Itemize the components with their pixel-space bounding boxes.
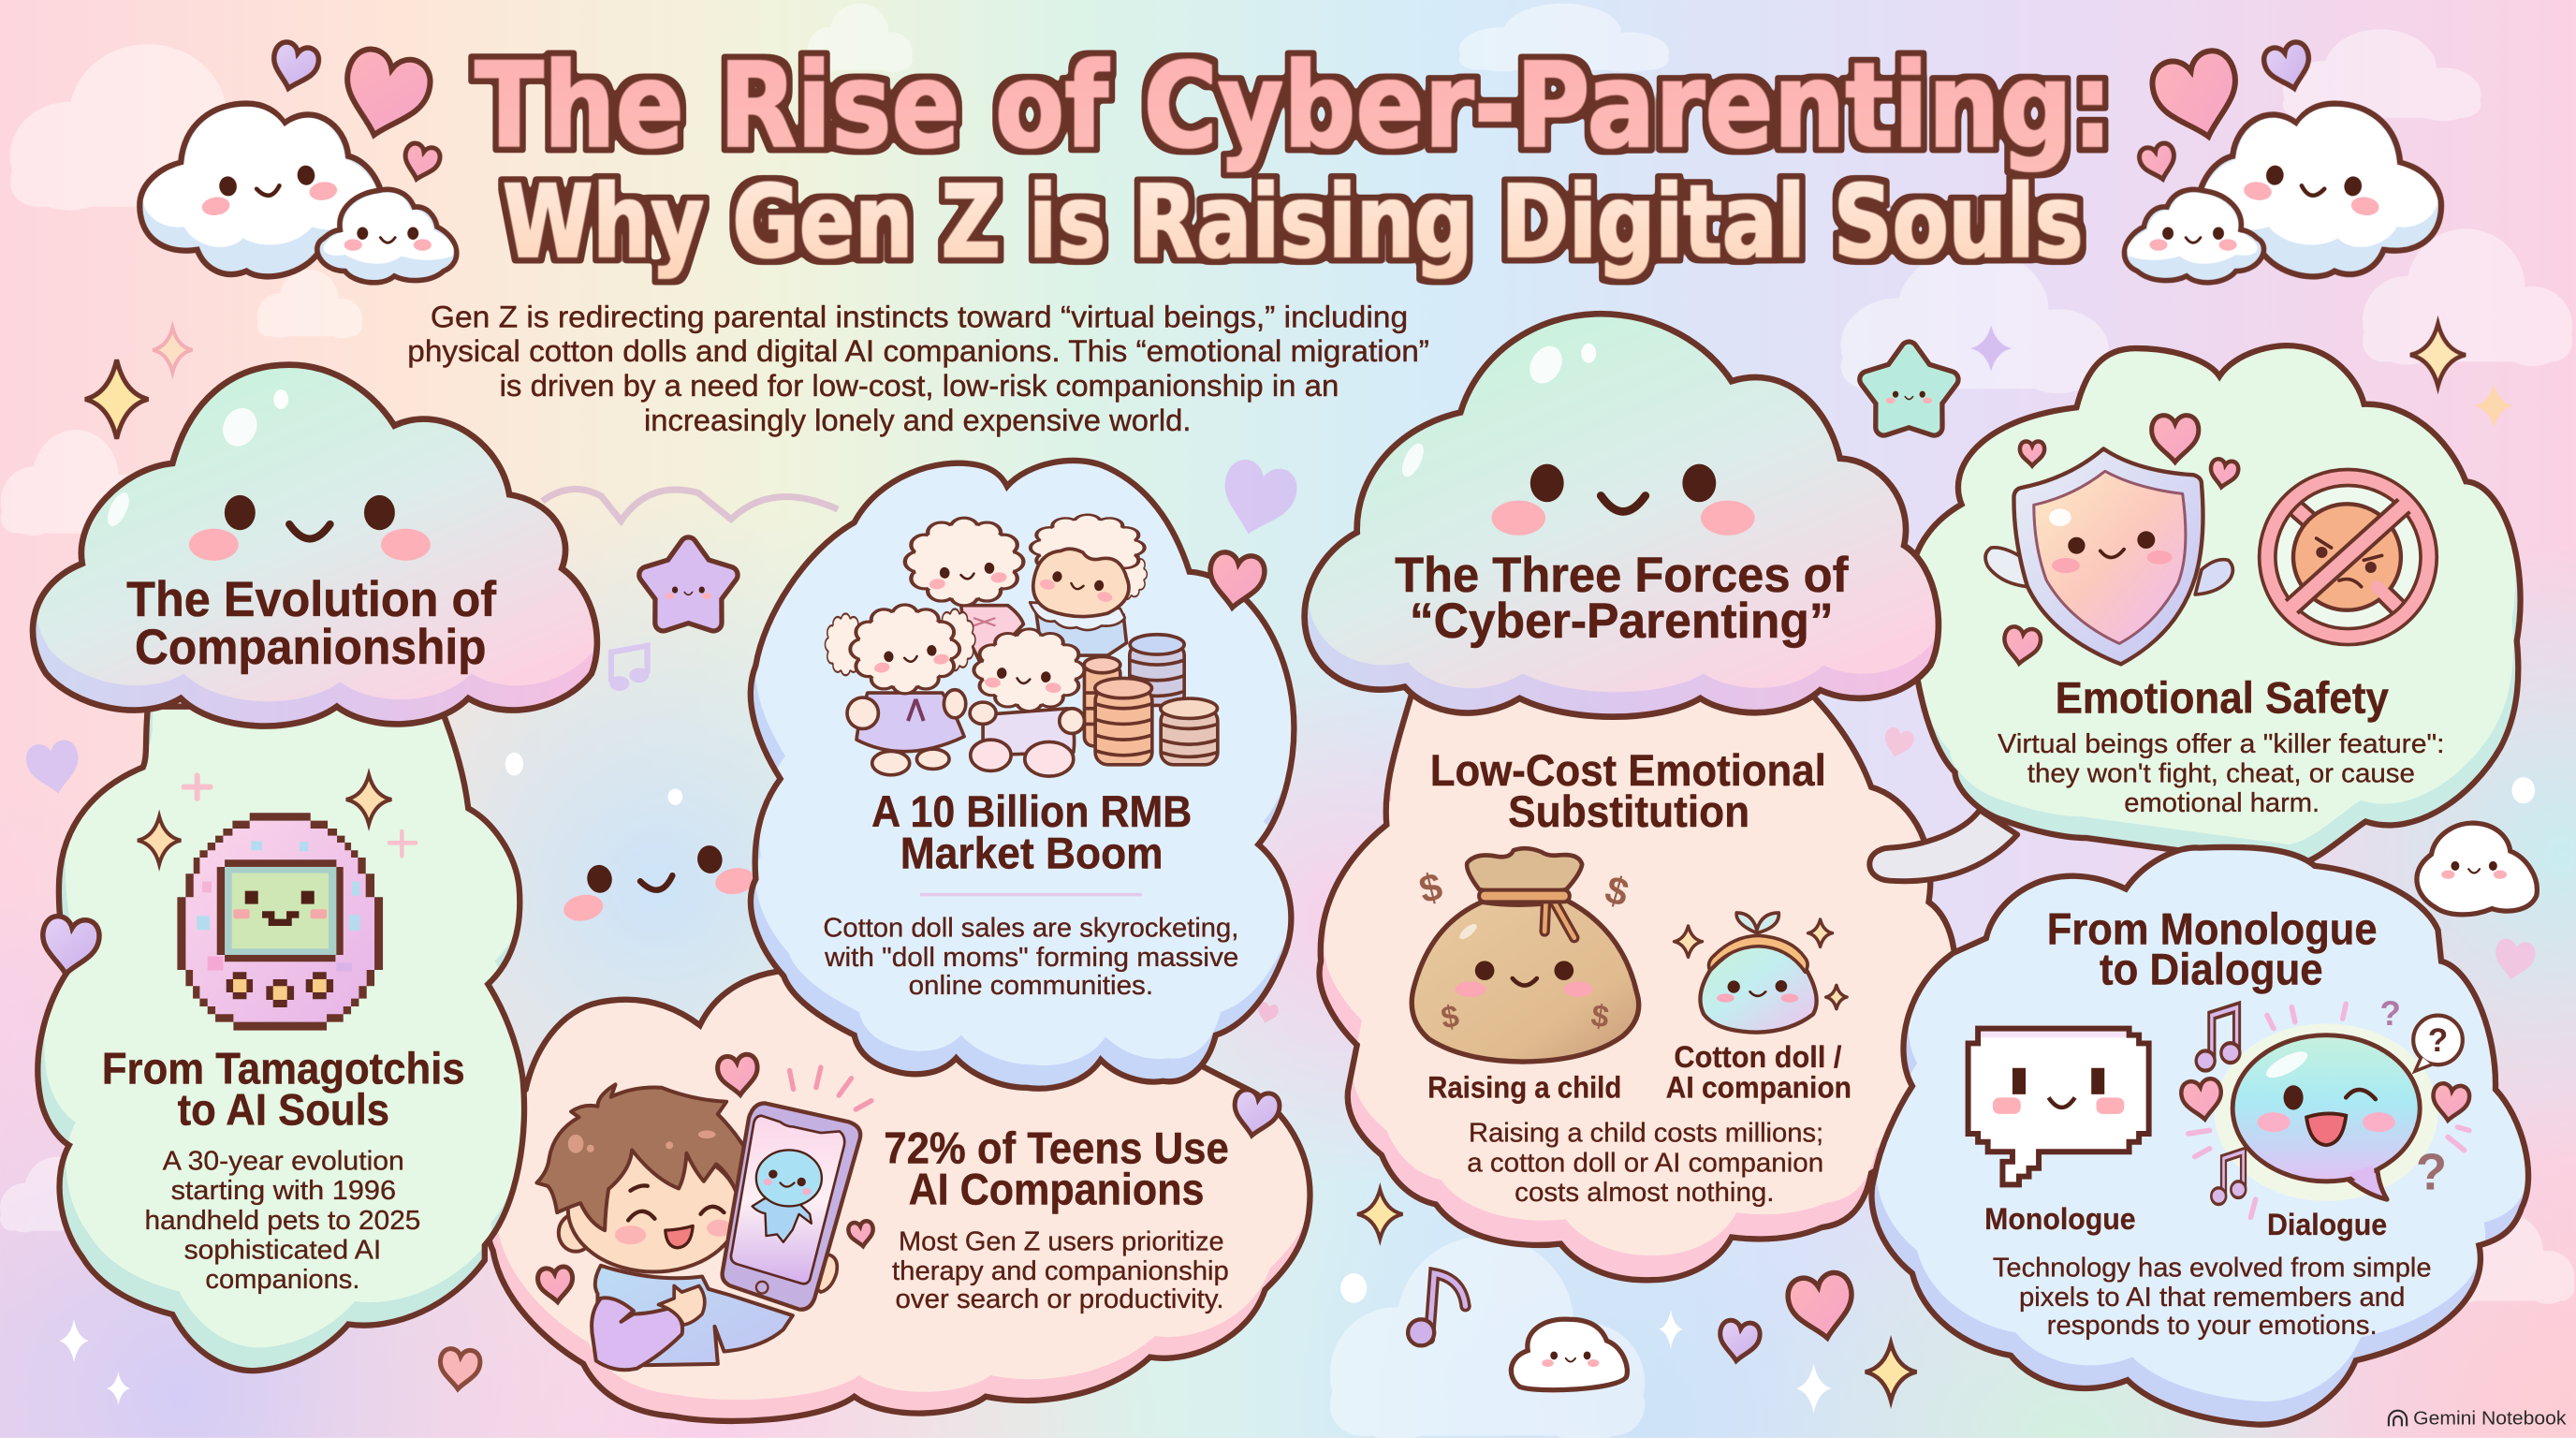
icon: money bag: $ xyxy=(1601,867,1633,915)
heading: evolution: The Evolution of xyxy=(126,572,497,627)
label: dialogue: Dialogue xyxy=(2267,1208,2387,1241)
icon: no-fighting sign xyxy=(2267,477,2429,637)
icon: money bag: $ xyxy=(1439,999,1462,1036)
text: monologue body: pixels to AI that remembers and xyxy=(2019,1283,2405,1313)
panel: emotional safety xyxy=(1906,324,2521,866)
icon: smiling shield xyxy=(1985,448,2429,664)
face: three forces cloud xyxy=(1491,464,1755,536)
heading: three forces xyxy=(1395,548,1849,649)
icon: music notes, hearts and question marks: ? xyxy=(2416,1144,2447,1201)
text: emotional safety body: emotional harm. xyxy=(2124,788,2320,818)
title line 1: The Rise of Cyber-Parenting: xyxy=(475,38,2113,174)
text: low-cost body: costs almost nothing. xyxy=(1515,1178,1774,1208)
icon: shield hearts xyxy=(2001,416,2240,666)
text: low-cost body: Raising a child costs millions; xyxy=(1469,1119,1823,1149)
icon: clouds right xyxy=(2125,104,2441,283)
heading: monologue: From Monologue xyxy=(2047,904,2378,954)
label: cotton doll / AI companion xyxy=(1666,1040,1852,1104)
heading: monologue xyxy=(2047,904,2378,994)
heading: tamagotchis: From Tamagotchis xyxy=(102,1044,465,1093)
text: low-cost body: a cotton doll or AI companion xyxy=(1467,1148,1823,1178)
intro text: Gen Z is redirecting parental instincts toward “virtual beings,” including xyxy=(431,300,1408,333)
small cloud: bottom xyxy=(1511,1319,1627,1390)
heading: emotional safety: Emotional Safety xyxy=(2056,674,2389,724)
icon: rainbow dialogue bubble xyxy=(2215,1023,2438,1201)
panel: tamagotchis xyxy=(37,683,531,1371)
text: monologue body: Technology has evolved from simple xyxy=(1993,1254,2431,1284)
panel: low-cost emotional substitution xyxy=(1320,666,1960,1280)
heading: low-cost: Low-Cost Emotional xyxy=(1430,746,1826,796)
text: tamagotchi body: A 30-year evolution xyxy=(163,1147,404,1177)
background face xyxy=(557,839,756,924)
panel: from monologue to dialogue xyxy=(1871,824,2533,1425)
text: tamagotchi body: sophisticated AI xyxy=(184,1235,381,1265)
heading: monologue: to Dialogue xyxy=(2100,945,2323,994)
heading: 72% of teens: AI Companions xyxy=(909,1165,1204,1214)
heading: 72% of teens: 72% of Teens Use xyxy=(884,1124,1229,1174)
icon: pixel speech bubble xyxy=(1969,1029,2149,1184)
icon: title hearts left xyxy=(267,39,442,183)
intro text: is driven by a need for low-cost, low-risk companionship in an xyxy=(500,369,1339,403)
label: cotton doll / AI companion: Cotton doll / xyxy=(1674,1040,1841,1074)
intro text xyxy=(407,300,1429,437)
connector tail xyxy=(1869,810,2017,881)
icon: music notes, hearts and question marks xyxy=(2180,994,2471,1217)
heading: 72% of teens xyxy=(884,1124,1229,1214)
panel: 72% of teens xyxy=(485,948,1315,1421)
icon: purple star xyxy=(648,546,729,623)
small cloud: right edge xyxy=(2417,823,2537,915)
icon: music notes, hearts and question marks: ? xyxy=(2428,1022,2448,1059)
text: market body: online communities. xyxy=(909,971,1153,1001)
text: tamagotchi body: starting with 1996 xyxy=(171,1176,396,1206)
heading: low-cost xyxy=(1430,746,1826,837)
icon: money bag: $ xyxy=(1414,864,1446,912)
text: emotional safety body xyxy=(1998,729,2445,818)
text: tamagotchi body xyxy=(145,1147,420,1295)
text: market body: with "doll moms" forming massive xyxy=(824,943,1238,973)
panel: market boom xyxy=(751,437,1299,1089)
icon: clouds left xyxy=(139,104,457,283)
icon: jelly doll xyxy=(1675,913,1847,1033)
panel: evolution of companionship header xyxy=(33,340,600,726)
icon: title hearts right xyxy=(2137,39,2316,183)
icon: coin stacks xyxy=(1084,635,1218,765)
label: raising a child: Raising a child xyxy=(1427,1070,1621,1104)
text: teens body: therapy and companionship xyxy=(892,1256,1229,1286)
heading: market boom xyxy=(871,787,1192,879)
watermark: Gemini Notebook xyxy=(2413,1409,2567,1430)
heading: low-cost: Substitution xyxy=(1508,787,1749,837)
text: monologue body: responds to your emotions. xyxy=(2047,1311,2378,1341)
label: monologue: Monologue xyxy=(1984,1202,2136,1236)
text: market body xyxy=(823,913,1238,1001)
heading: market boom: A 10 Billion RMB xyxy=(871,787,1192,837)
title group xyxy=(139,38,2441,283)
text: market body: Cotton doll sales are skyrocketing, xyxy=(823,913,1238,943)
title line 2: Why Gen Z is Raising Digital Souls xyxy=(503,165,2083,281)
heading: market boom: Market Boom xyxy=(900,829,1164,879)
text: low-cost body xyxy=(1467,1119,1823,1208)
icon: mint star xyxy=(1868,350,1950,427)
icon: hearts around boy xyxy=(536,1053,1281,1304)
icon: tamagotchi sparkles xyxy=(138,775,416,864)
text: tamagotchi body: companions. xyxy=(205,1265,359,1295)
decorative hearts, stars and sparkles xyxy=(23,324,2538,1413)
illustration: cotton dolls and coins xyxy=(825,515,1218,776)
panel: three forces header xyxy=(1305,289,1941,717)
text: teens body: over search or productivity. xyxy=(896,1284,1224,1314)
face: header cloud xyxy=(189,495,431,561)
text: teens body: Most Gen Z users prioritize xyxy=(899,1227,1224,1257)
icon: heart on market panel xyxy=(1206,550,1266,611)
heading: evolution: Companionship xyxy=(135,620,487,675)
icon: music notes, hearts and question marks: ? xyxy=(2379,994,2401,1033)
icon: money bag: $ xyxy=(1589,999,1612,1035)
text: emotional safety body: Virtual beings offer a "killer feature": xyxy=(1998,729,2445,759)
icon: purple heart xyxy=(37,915,101,977)
text: emotional safety body: they won't fight, cheat, or cause xyxy=(2027,758,2415,788)
heading: tamagotchis: to AI Souls xyxy=(178,1085,389,1135)
text: teens body xyxy=(892,1227,1229,1314)
illustration: boy with phone xyxy=(536,1067,871,1370)
heading: tamagotchis xyxy=(102,1044,465,1135)
icon: pixel tamagotchi xyxy=(177,813,383,1031)
text: tamagotchi body: handheld pets to 2025 xyxy=(145,1206,420,1236)
intro text: physical cotton dolls and digital AI companions. This “emotional migration” xyxy=(407,334,1429,368)
heading: three forces: “Cyber-Parenting” xyxy=(1410,594,1834,649)
text: monologue body xyxy=(1993,1254,2431,1341)
heading: three forces: The Three Forces of xyxy=(1395,548,1849,603)
label: cotton doll / AI companion: AI companion xyxy=(1666,1070,1852,1104)
icon: money bag xyxy=(1412,848,1639,1062)
heading: evolution xyxy=(126,572,497,675)
intro text: increasingly lonely and expensive world. xyxy=(644,404,1191,437)
